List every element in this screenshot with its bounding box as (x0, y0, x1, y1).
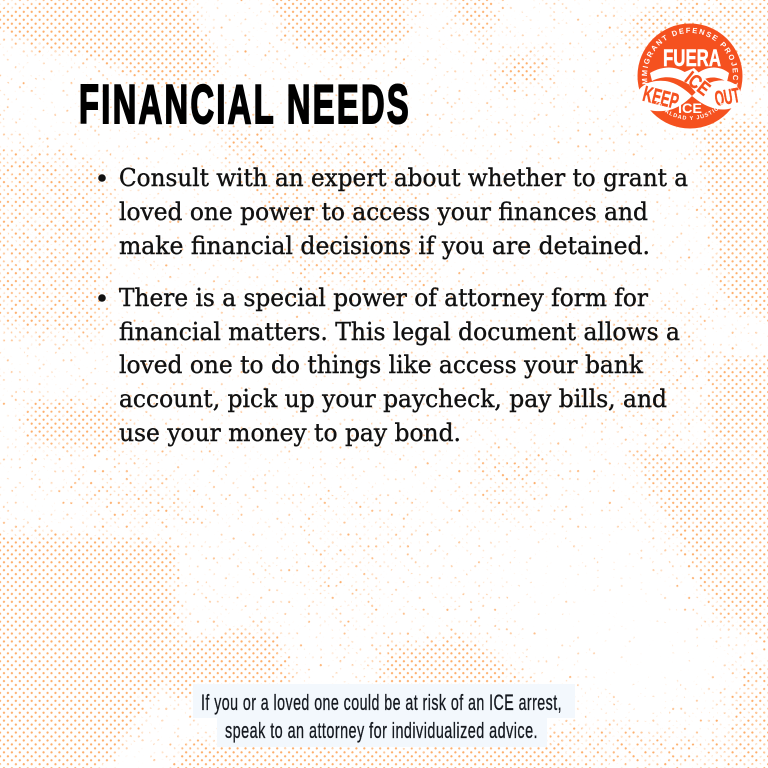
footer callout: speak to an attorney for individualized advice. (225, 718, 538, 743)
bullet list: second item: use your money to pay bond. (119, 418, 461, 447)
bullet list: first item: make financial decisions if you are detained. (119, 231, 650, 260)
title: FINANCIAL NEEDS (79, 73, 411, 135)
bullet list: second item (98, 283, 680, 447)
logo: Immigrant Defense Project badge: ICE (680, 68, 714, 100)
bullet marker (98, 294, 106, 302)
logo: Immigrant Defense Project badge: OUT (713, 84, 742, 111)
bullet marker (98, 174, 106, 182)
logo: Immigrant Defense Project badge: ICE (678, 100, 702, 116)
logo: Immigrant Defense Project badge: FUERA (663, 45, 721, 72)
logo: Immigrant Defense Project badge: IGUALDAD Y JUSTICIA (656, 102, 724, 120)
bullet list: second item: financial matters. This legal document allows a (119, 317, 680, 346)
bullet list: first item: Consult with an expert about whether to grant a (119, 163, 688, 192)
bullet list: second item: loved one to do things like access your bank (119, 350, 644, 379)
logo: Immigrant Defense Project badge: IMMIGRANT DEFENSE PROJECT (642, 28, 738, 86)
logo: Immigrant Defense Project badge (637, 24, 742, 128)
bullet list: first item (98, 163, 688, 260)
footer callout (193, 684, 575, 747)
footer callout: If you or a loved one could be at risk of an ICE arrest, (201, 690, 562, 715)
logo: Immigrant Defense Project badge: KEEP (640, 81, 681, 114)
bullet list: second item: There is a special power of attorney form for (119, 283, 648, 312)
bullet list: second item: account, pick up your paycheck, pay bills, and (119, 384, 667, 413)
bullet list: first item: loved one power to access your finances and (119, 197, 648, 226)
